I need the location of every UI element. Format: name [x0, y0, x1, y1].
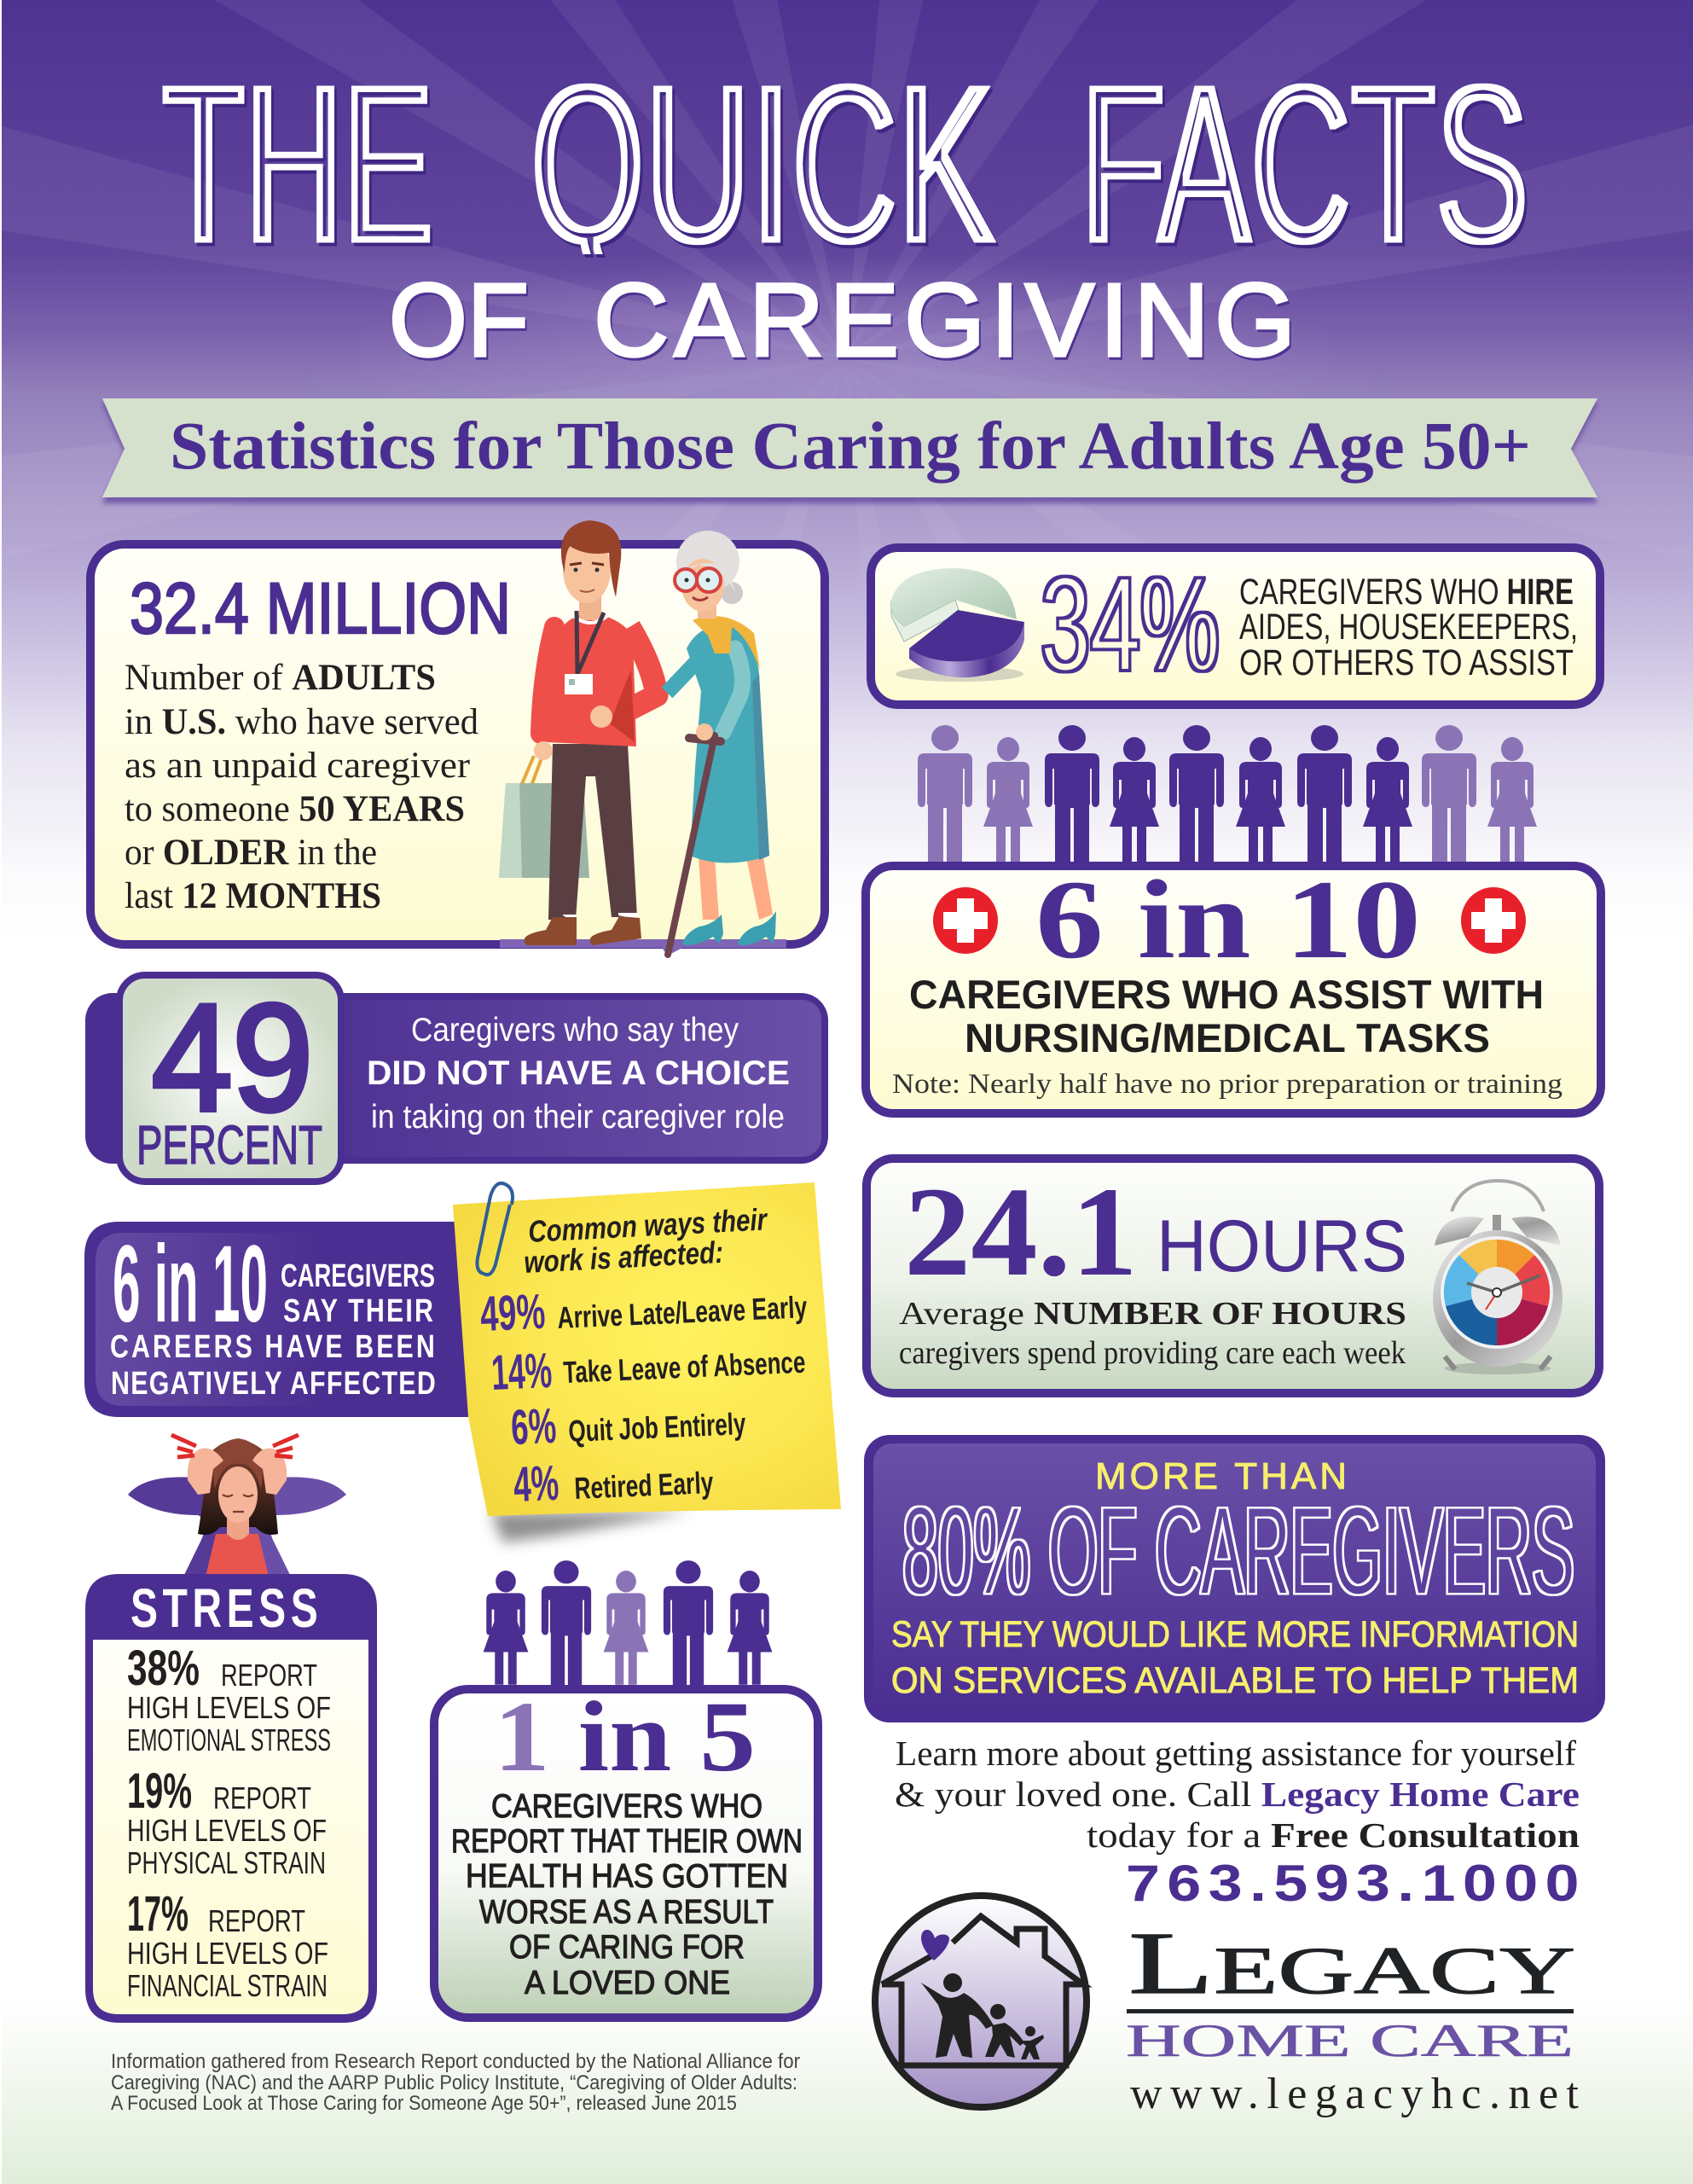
stress list [127, 1641, 331, 2003]
statistic: 1 in 5 [494, 1681, 756, 1792]
stress heading: STRESS [130, 1577, 318, 1639]
panel: 6 in 10 careers [84, 1222, 473, 1417]
caption: CAREGIVERS WHO ASSIST WITH [909, 972, 1544, 1017]
red stress marks [171, 1435, 299, 1457]
subtitle: OF [389, 262, 529, 378]
panel: 6 in 10 careers: 6 in 10 [113, 1223, 268, 1345]
caption [891, 1614, 1579, 1701]
work effects list: 14% [490, 1343, 553, 1401]
title [162, 84, 1527, 258]
call to action text: Learn more about getting assistance for yourself [896, 1734, 1576, 1773]
logo emblem [875, 1896, 1087, 2107]
caption: OR OTHERS TO ASSIST [1239, 642, 1574, 683]
icon: heart [921, 1930, 949, 1960]
sticky note [453, 1182, 841, 1542]
caption: ON SERVICES AVAILABLE TO HELP THEM [891, 1660, 1579, 1701]
caption [909, 972, 1544, 1060]
caption: SAY THEY WOULD LIKE MORE INFORMATION [891, 1614, 1579, 1655]
work effects list: 4% [513, 1455, 560, 1513]
stress list: 38% [127, 1641, 200, 1696]
icon: pie chart [891, 568, 1024, 682]
description text: Number of ADULTS [125, 658, 436, 698]
call to action text [895, 1734, 1580, 1855]
call to action text: & your loved one. Call Legacy Home Care [895, 1774, 1580, 1814]
phone number: 763.593.1000 [1126, 1856, 1580, 1913]
panel: 49 percent [85, 973, 828, 1182]
caption: DID NOT HAVE A CHOICE [367, 1054, 790, 1092]
icon: alarm clock [1433, 1181, 1563, 1374]
man [525, 520, 657, 945]
banner [102, 398, 1597, 503]
caption: AIDES, HOUSEKEEPERS, [1239, 607, 1578, 648]
description text: to someone 50 YEARS [125, 789, 465, 829]
stress list: REPORT [208, 1903, 305, 1938]
call to action text: today for a Free Consultation [1087, 1815, 1580, 1855]
note heading: work is affected: [523, 1234, 724, 1280]
caption: NEGATIVELY AFFECTED [111, 1366, 436, 1402]
caption: Caregivers who say they [411, 1012, 739, 1048]
panel: 80 percent [864, 1435, 1605, 1722]
work effects list [479, 1284, 808, 1513]
note heading [523, 1201, 769, 1280]
source footnote: Caregiving (NAC) and the AARP Public Policy Institute, “Caregiving of Older Adults: [111, 2071, 797, 2094]
stress list: PHYSICAL STRAIN [127, 1845, 326, 1880]
stress list: 17% [127, 1886, 188, 1942]
stress list: HIGH LEVELS OF [127, 1813, 327, 1848]
caption [1239, 572, 1578, 683]
caption: Average NUMBER OF HOURS [899, 1296, 1406, 1332]
work effects list: Arrive Late/Leave Early [557, 1289, 808, 1335]
statistic: 24.1 [904, 1161, 1138, 1303]
stress list: REPORT [213, 1780, 311, 1815]
stress list: 19% [127, 1763, 192, 1819]
logo wordmark: L EGACY [1128, 1914, 1575, 2013]
stress list: HIGH LEVELS OF [127, 1936, 328, 1971]
house outline [882, 1916, 1083, 2065]
title: THE [162, 38, 433, 291]
panel: 1 in 5 [434, 1681, 818, 2018]
older woman [667, 531, 776, 955]
icon: red cross left [933, 887, 998, 954]
statistic: 34% [1041, 549, 1220, 700]
panel: 24.1 hours [867, 1159, 1599, 1393]
illustration: caregiver and older woman [499, 520, 786, 956]
panel: 34 percent [871, 548, 1600, 705]
caption: SAY THEIR [283, 1293, 433, 1329]
caption [110, 1258, 436, 1402]
bag [499, 756, 589, 878]
panel: stress [85, 1574, 377, 2023]
stress list: EMOTIONAL STRESS [127, 1722, 331, 1757]
title: QUICK [531, 38, 995, 291]
caption: CAREGIVERS WHO HIRE [1239, 572, 1574, 613]
statistic: 6 in 10 [1035, 857, 1421, 982]
icon: paperclip [477, 1183, 513, 1275]
work effects list: Quit Job Entirely [568, 1406, 746, 1449]
caption: A LOVED ONE [525, 1965, 730, 2001]
work effects list: Take Leave of Absence [563, 1345, 806, 1390]
stress list: HIGH LEVELS OF [127, 1690, 331, 1725]
illustration: stressed woman [128, 1435, 346, 1577]
icon: red cross right [1461, 887, 1526, 954]
note: Note: Nearly half have no prior preparation or training [892, 1069, 1563, 1100]
caption: caregivers spend providing care each week [899, 1335, 1406, 1371]
icon row: ten people [918, 725, 1537, 863]
stress list: REPORT [221, 1658, 317, 1693]
subtitle: CAREGIVING [594, 262, 1296, 378]
logo wordmark [1126, 1914, 1580, 2118]
caption [899, 1296, 1406, 1371]
description text: last 12 MONTHS [125, 876, 381, 916]
caption [451, 1788, 803, 2001]
family figures [921, 1973, 1044, 2059]
work effects list: 49% [479, 1284, 546, 1342]
statistic heading: 32.4 MILLION [130, 568, 511, 648]
caption: CAREGIVERS [281, 1258, 435, 1294]
unit: HOURS [1157, 1205, 1407, 1287]
panel: 32.4 million [90, 520, 825, 956]
caption: REPORT THAT THEIR OWN [451, 1823, 803, 1860]
caption: CAREERS HAVE BEEN [110, 1329, 435, 1365]
percent tile: 49 [152, 973, 313, 1142]
caption: in taking on their caregiver role [371, 1099, 785, 1136]
description text: or OLDER in the [125, 833, 377, 873]
work effects list: 6% [510, 1398, 558, 1455]
banner heading: Statistics for Those Caring for Adults Age 50+ [170, 410, 1531, 484]
caption: HEALTH HAS GOTTEN [466, 1858, 788, 1895]
stress list: FINANCIAL STRAIN [127, 1968, 328, 2003]
icon row: five people [484, 1560, 772, 1686]
logo wordmark: HOME CARE [1126, 2015, 1574, 2066]
lead-in: MORE THAN [1095, 1455, 1347, 1497]
background sunburst rays [2, 0, 1693, 316]
source footnote [111, 2050, 800, 2115]
source footnote: A Focused Look at Those Caring for Someone Age 50+”, released June 2015 [111, 2092, 737, 2115]
description text: as an unpaid caregiver [125, 746, 470, 786]
caption: CAREGIVERS WHO [491, 1788, 762, 1825]
percent tile: PERCENT [136, 1114, 322, 1176]
caption [367, 1012, 790, 1136]
panel: 6 in 10 medical tasks [866, 857, 1601, 1113]
caption: NURSING/MEDICAL TASKS [965, 1015, 1490, 1060]
work effects list: Retired Early [574, 1465, 714, 1506]
caption: WORSE AS A RESULT [479, 1894, 774, 1931]
percent tile [119, 973, 341, 1182]
description text: in U.S. who have served [125, 702, 478, 742]
caption: OF CARING FOR [509, 1929, 745, 1966]
note heading: Common ways their [527, 1201, 769, 1249]
logo wordmark: www.legacyhc.net [1130, 2070, 1580, 2118]
description text [125, 658, 478, 916]
source footnote: Information gathered from Research Report conducted by the National Alliance for [111, 2050, 800, 2073]
